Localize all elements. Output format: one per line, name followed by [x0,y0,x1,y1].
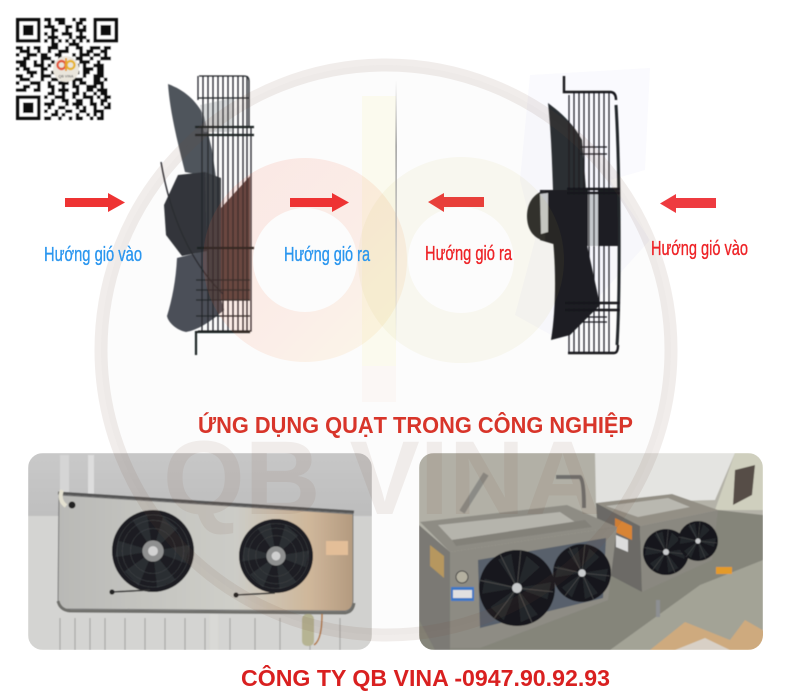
label: air out, right fan: Hướng gió ra [425,243,513,265]
label: air out, left fan: Hướng gió ra [284,244,371,266]
faint backdrop behind right fan [515,68,650,340]
QR code [16,18,118,120]
condensing unit, front [419,505,617,650]
QR centre logo: QB VINA [59,74,74,78]
icon: left axial fan, side view [161,76,254,355]
arrow: air out, right fan [428,193,484,212]
cardboard box [650,620,766,650]
footer: company name and phone: CÔNG TY QB VINA -0947.90.92.93 [241,664,610,691]
arrow: air in, right fan [660,194,716,213]
label: air in, left fan: Hướng gió vào [44,244,142,266]
condensing unit, rear [596,494,718,592]
divider line between fans [396,80,397,345]
label: air in, right fan: Hướng gió vào [651,238,748,260]
title: ỨNG DỤNG QUẠT TRONG CÔNG NGHIỆP [198,411,633,438]
arrow: air out, left fan [290,193,349,212]
watermark: QB VINA logo overlay [101,65,671,635]
icon: right axial fan, side view [527,76,620,353]
watermark: QB VINA logo overlay: QB VINA [163,420,601,537]
arrow: air in, left fan [65,193,125,212]
photo: ceiling evaporator unit with two fans [28,453,372,650]
photo: outdoor condensing units [419,453,766,650]
